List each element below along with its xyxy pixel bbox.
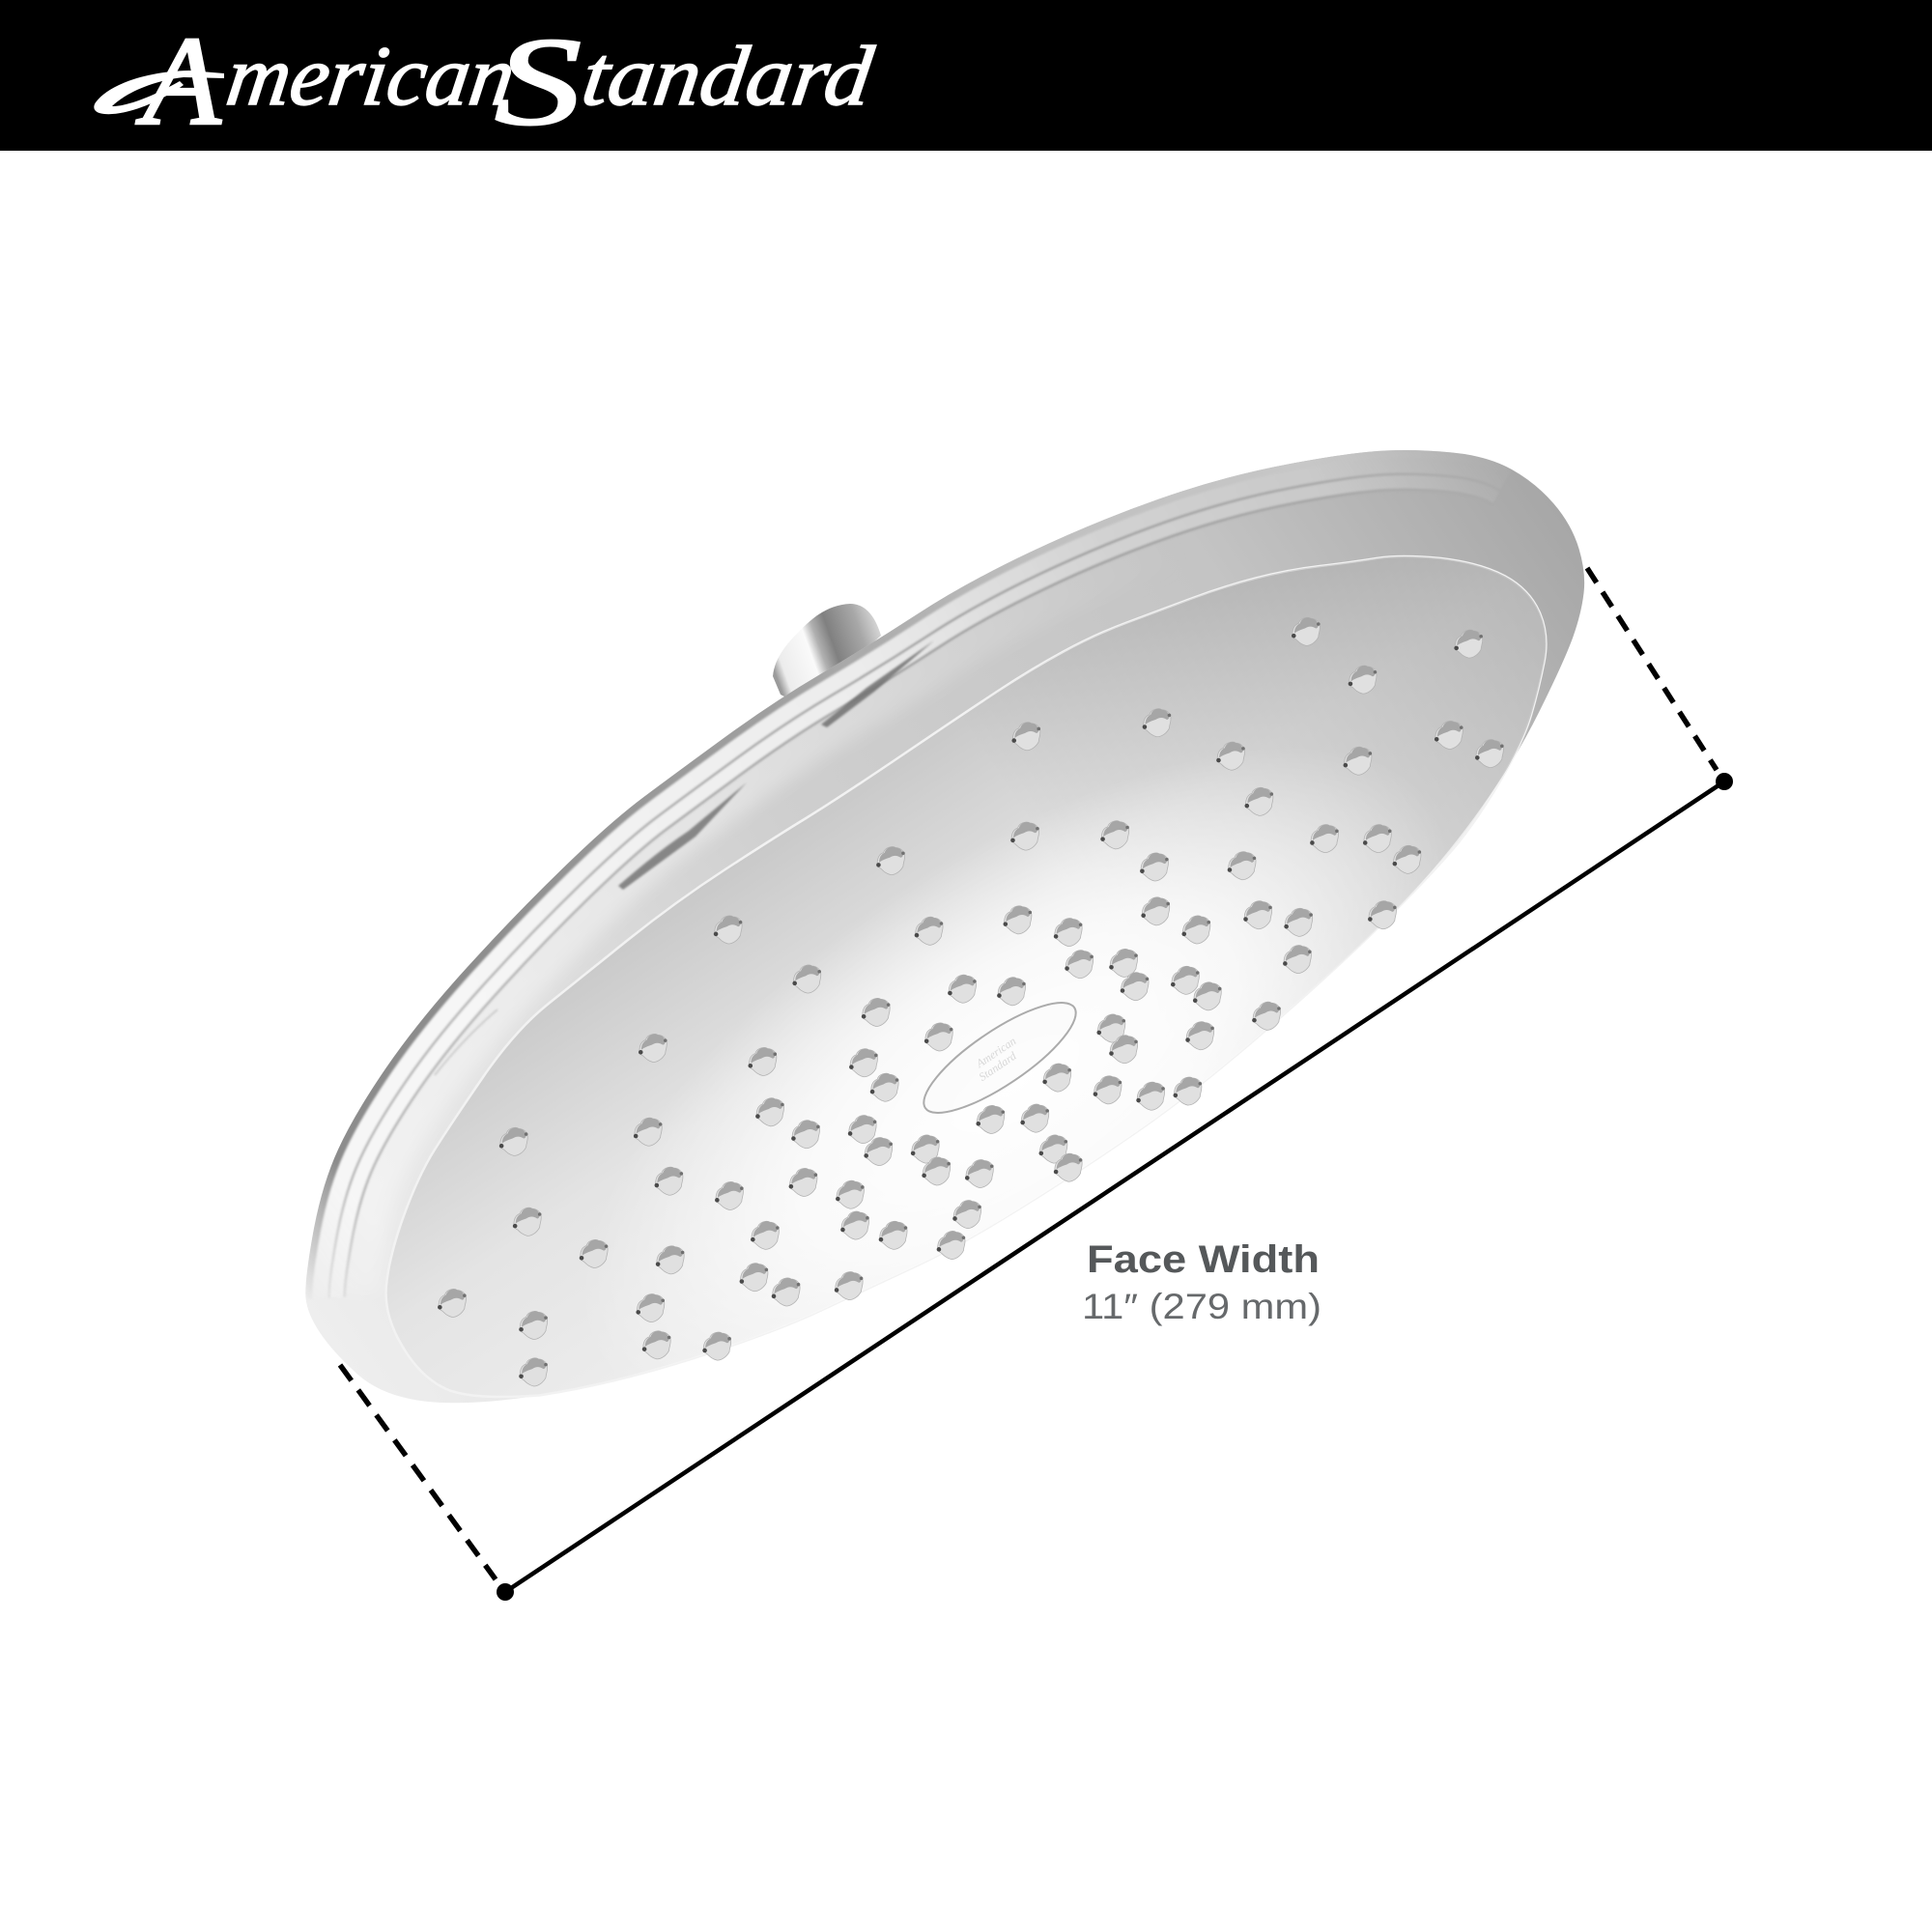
face plate shading [685,556,1546,1309]
center logo badge [910,985,1090,1130]
dashed extension line left [340,1365,496,1579]
center logo badge: American [973,1034,1018,1071]
label: face width: Face Width [1087,1238,1320,1281]
shower head [305,450,1584,1403]
header bar [0,0,1932,151]
brand logo: S [495,13,582,152]
endpoint dot right [1716,773,1733,790]
shower head outer rim [305,450,1584,1403]
rim ridge bands [305,450,1512,1299]
brand logo: merican [221,29,521,124]
brand logo [94,10,879,152]
label: size value: 11″ (279 mm) [1082,1287,1321,1326]
endpoint dot left [497,1583,514,1601]
shower head face plate [386,556,1546,1397]
dashed extension line right [1587,568,1717,770]
icon: shower arm connector [773,604,881,705]
brand logo: A [135,10,222,152]
center logo badge: Standard [977,1048,1019,1084]
brand logo: tandard [577,29,879,124]
solid measure line [505,781,1724,1592]
dimension: face width [340,568,1733,1601]
spray nozzles [438,617,1504,1386]
